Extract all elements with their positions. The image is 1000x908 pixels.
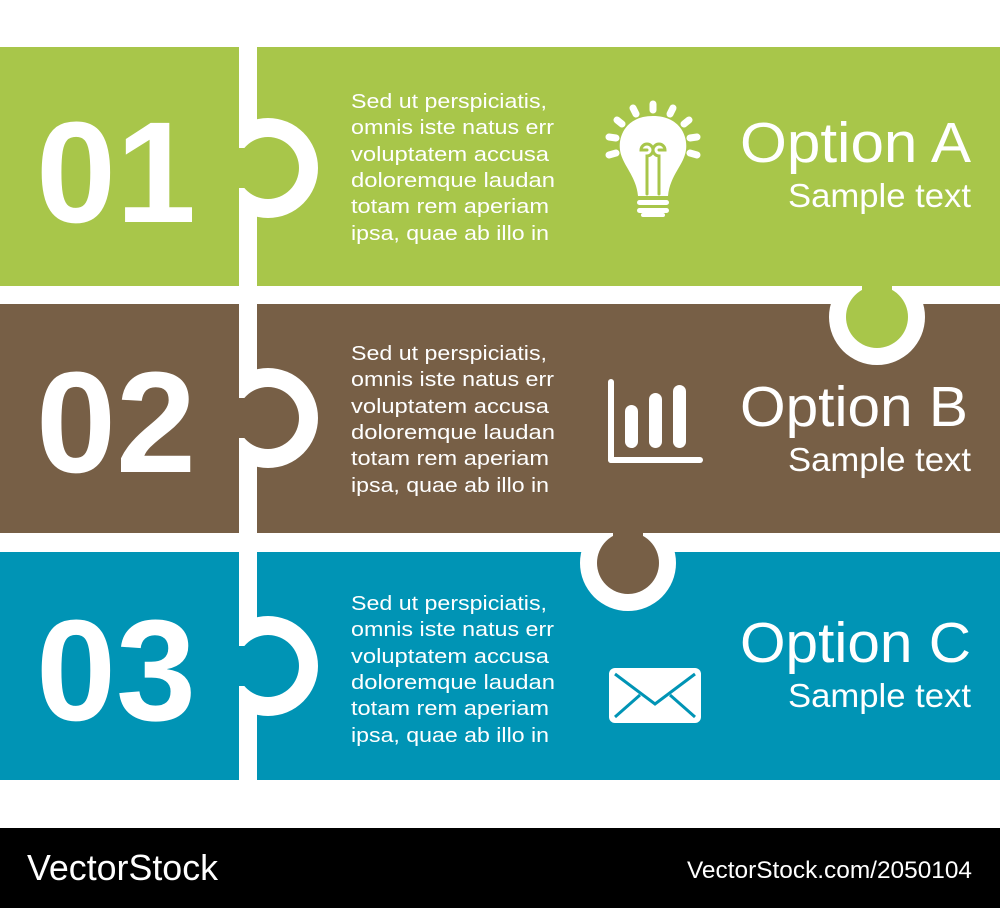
text block C (351, 593, 555, 747)
title: Option C: Option C (740, 611, 971, 675)
number 02: 02 (36, 342, 196, 503)
icon: light bulb (609, 104, 697, 217)
title: Option A: Sample text (788, 177, 971, 214)
text block B (351, 343, 555, 497)
text block B: omnis iste natus err (351, 369, 554, 391)
text block B: doloremque laudan (351, 422, 555, 444)
title: Option B: Sample text (788, 441, 971, 478)
puzzle connectors: left knobs (239, 47, 318, 780)
text block A: doloremque laudan (351, 170, 555, 192)
panel: row 1 green (0, 47, 1000, 348)
panel: row 2 brown (0, 269, 1000, 594)
text block C: ipsa, quae ab illo in (351, 725, 549, 747)
text block C: voluptatem accusa (351, 646, 550, 668)
text block C: totam rem aperiam (351, 698, 549, 720)
title: Option A: Option A (740, 111, 971, 175)
text block C: Sed ut perspiciatis, (351, 593, 547, 615)
footer bar: VectorStock (27, 847, 219, 888)
icon: bar chart (608, 379, 703, 463)
text block A: ipsa, quae ab illo in (351, 223, 549, 245)
text block A: voluptatem accusa (351, 144, 550, 166)
title: Option B: Option B (740, 375, 968, 439)
text block B: totam rem aperiam (351, 448, 549, 470)
text block B: ipsa, quae ab illo in (351, 475, 549, 497)
title: Option C: Sample text (788, 677, 971, 714)
number 03: 03 (36, 590, 196, 751)
text block B: voluptatem accusa (351, 396, 550, 418)
number 01: 01 (36, 92, 196, 253)
text block B: Sed ut perspiciatis, (351, 343, 547, 365)
title: Option B (740, 375, 971, 478)
text block A: totam rem aperiam (351, 196, 549, 218)
text block C: doloremque laudan (351, 672, 555, 694)
text block A: Sed ut perspiciatis, (351, 91, 547, 113)
text block C: omnis iste natus err (351, 619, 554, 641)
panel: row 3 blue (0, 515, 1000, 780)
icon: envelope (609, 668, 701, 723)
title: Option C (740, 611, 971, 714)
text block A: omnis iste natus err (351, 117, 554, 139)
footer bar: VectorStock.com/2050104 (687, 857, 972, 884)
footer bar (0, 828, 1000, 908)
text block A (351, 91, 555, 245)
title: Option A (740, 111, 971, 214)
